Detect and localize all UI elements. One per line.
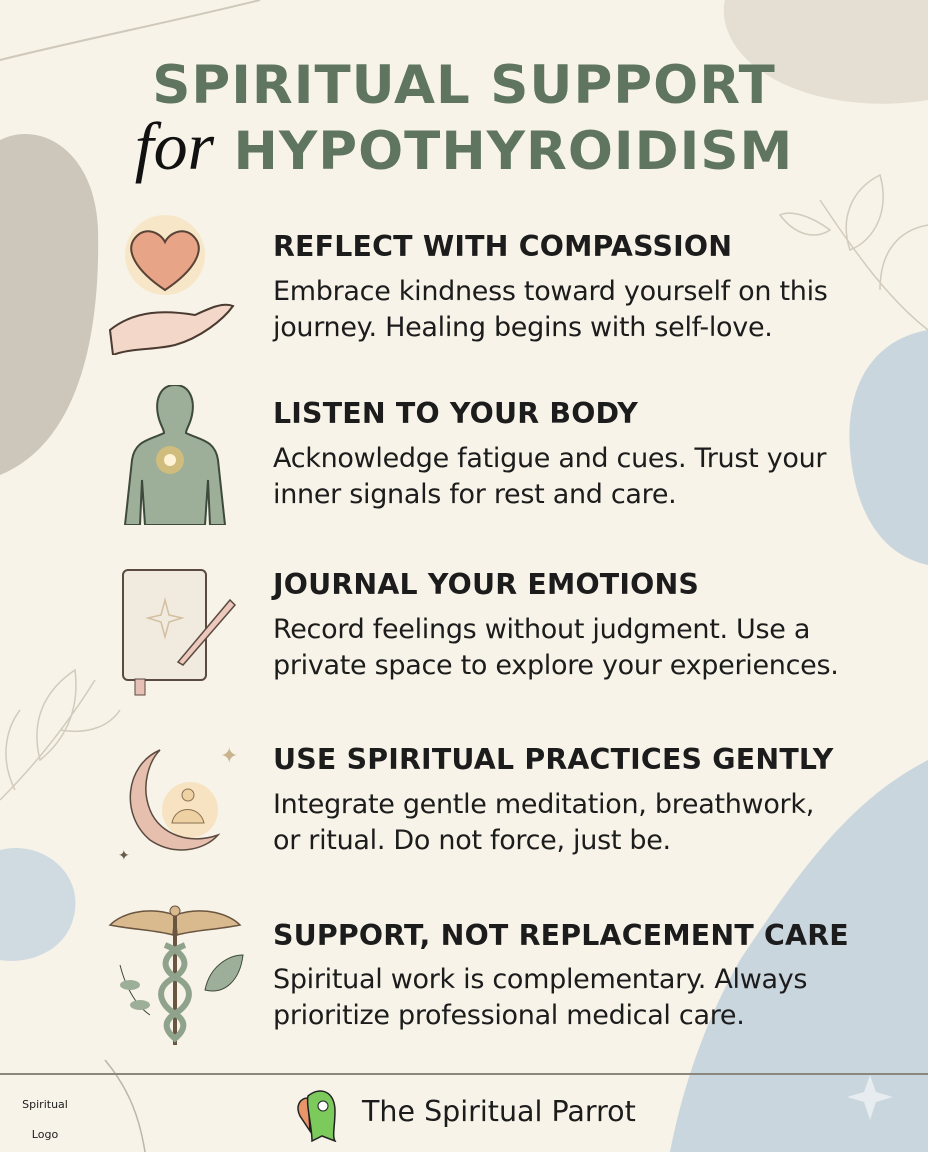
text: SUPPORT, NOT REPLACEMENT CARE (273, 919, 849, 952)
section 4 (273, 743, 834, 856)
logo placeholder: Logo (32, 1128, 58, 1141)
section 5 (273, 919, 849, 1031)
footer brand (297, 1090, 636, 1142)
title (135, 55, 793, 184)
icon: moon meditation: ✦ (220, 744, 238, 769)
section 2 (273, 397, 826, 510)
logo placeholder: Spiritual (22, 1098, 68, 1111)
text: REFLECT WITH COMPASSION (273, 230, 732, 263)
text: inner signals for rest and care. (273, 479, 676, 510)
text: LISTEN TO YOUR BODY (273, 397, 638, 430)
text: Record feelings without judgment. Use a (273, 614, 810, 645)
icon: caduceus (108, 906, 244, 1045)
text: Spiritual work is complementary. Always (273, 964, 807, 995)
text: private space to explore your experiences. (273, 650, 838, 681)
icon: journal (122, 569, 236, 696)
title: for HYPOTHYROIDISM (135, 108, 793, 184)
icon: heart in hand (108, 215, 234, 355)
icon: moon meditation: ✦ (118, 848, 130, 864)
text: or ritual. Do not force, just be. (273, 825, 671, 856)
logo placeholder (22, 1098, 68, 1141)
title: SPIRITUAL SUPPORT (152, 55, 776, 116)
text: JOURNAL YOUR EMOTIONS (273, 568, 699, 601)
section 3 (271, 568, 838, 681)
text: Embrace kindness toward yourself on this (273, 276, 828, 307)
text: USE SPIRITUAL PRACTICES GENTLY (273, 743, 834, 776)
footer brand: The Spiritual Parrot (362, 1095, 636, 1128)
text: Acknowledge fatigue and cues. Trust your (273, 443, 826, 474)
icon: moon meditation (118, 744, 238, 864)
text: prioritize professional medical care. (273, 1000, 745, 1031)
icon: body (124, 385, 226, 525)
text: journey. Healing begins with self-love. (273, 312, 773, 343)
text: Integrate gentle meditation, breathwork, (273, 789, 814, 820)
section 1 (272, 230, 828, 343)
